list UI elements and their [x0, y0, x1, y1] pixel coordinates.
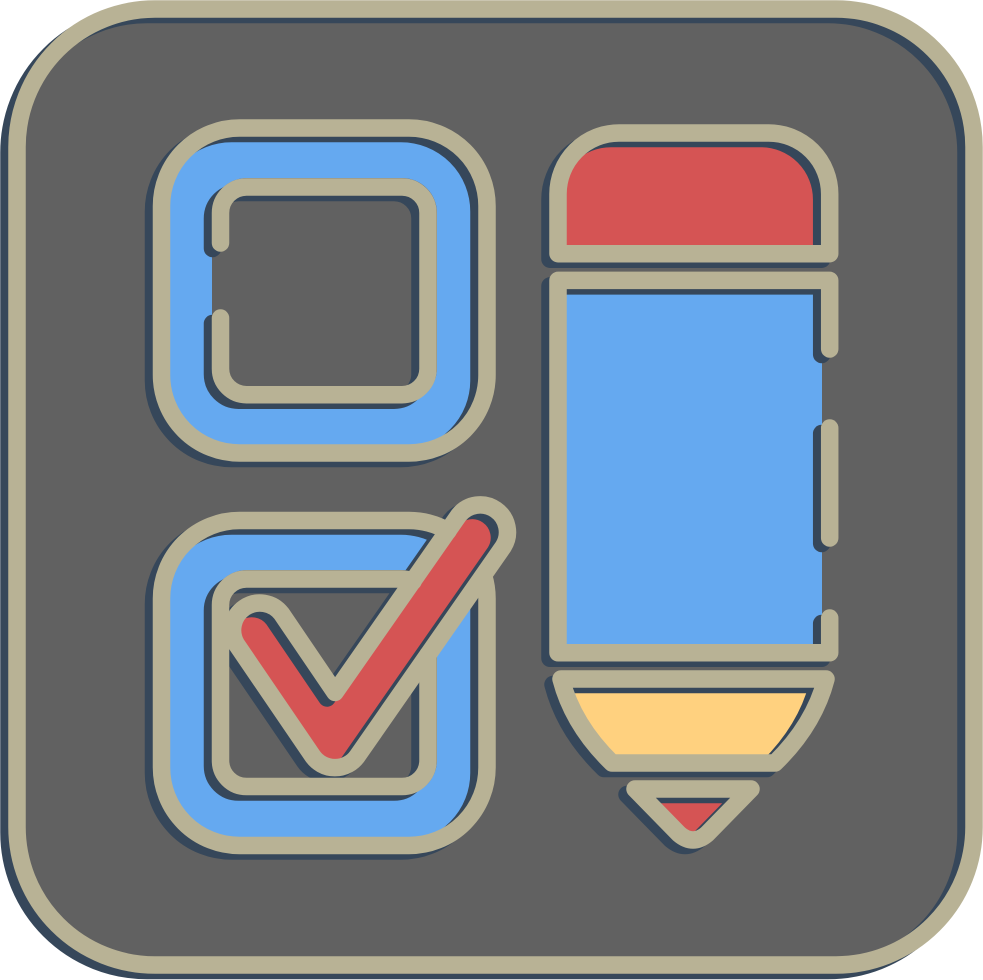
pencil lead tip [627, 789, 751, 846]
pencil sharpened section [553, 679, 826, 768]
icon: ticked checkbox [154, 505, 507, 851]
icon: pencil [550, 133, 830, 846]
pencil eraser [550, 133, 830, 259]
icon: empty checkbox [154, 128, 487, 458]
pencil body [550, 280, 830, 658]
icon: red check mark [225, 505, 507, 773]
